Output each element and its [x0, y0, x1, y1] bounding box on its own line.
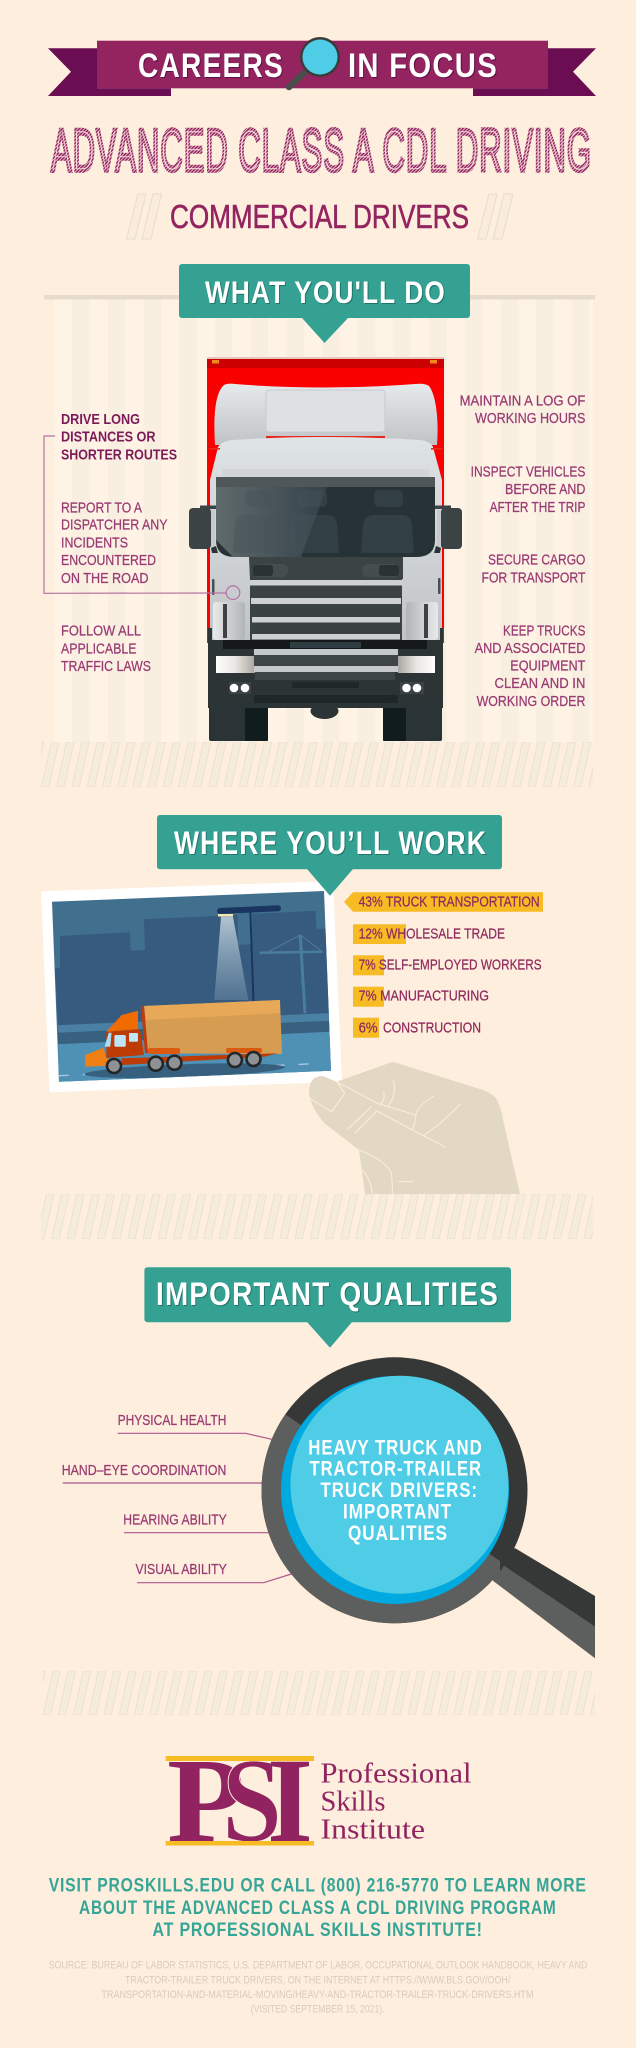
logo: professional skills institute: Professional	[320, 1758, 472, 1790]
text: duties right: FOR TRANSPORT	[482, 569, 585, 586]
text: duties right: SECURE CARGO	[488, 551, 585, 568]
text: duties right: WORKING ORDER	[477, 693, 586, 710]
icon: small magnifier	[289, 37, 340, 87]
bar: 12% wholesale trade	[353, 924, 505, 944]
banner: careers in focus: IN FOCUS	[348, 47, 498, 85]
quality labels	[62, 1412, 291, 1583]
bar: 6% construction	[353, 1018, 481, 1038]
callout line	[44, 436, 240, 600]
label: physical health: PHYSICAL HEALTH	[118, 1412, 226, 1429]
text: duties left: SHORTER ROUTES	[61, 446, 177, 463]
source note	[49, 1959, 588, 2016]
fog lamps	[229, 682, 424, 694]
icon: large magnifier	[262, 1357, 595, 1658]
text: duties left: ON THE ROAD	[61, 570, 149, 587]
text: duties left: FOLLOW ALL	[61, 623, 141, 640]
subtitle with slashes	[127, 194, 513, 239]
call to action	[49, 1875, 587, 1941]
text: duties left: REPORT TO A	[61, 499, 142, 516]
source note: (VISITED SEPTEMBER 15, 2021).	[251, 2004, 385, 2016]
bar: 7% manufacturing: 7% MANUFACTURING	[359, 988, 489, 1005]
banner: careers in focus	[48, 37, 596, 96]
heading: what you'll do: WHAT YOU'LL DO	[205, 274, 446, 310]
bar: 7% manufacturing	[353, 987, 489, 1007]
text: duties right	[460, 392, 586, 710]
call to action: AT PROFESSIONAL SKILLS INSTITUTE!	[152, 1919, 483, 1941]
text: duties left: INCIDENTS	[61, 535, 128, 552]
text: duties left: ENCOUNTERED	[61, 552, 156, 569]
chart: workplace percentages	[344, 892, 543, 1038]
truck front illustration	[189, 357, 462, 741]
source note: TRACTOR-TRAILER TRUCK DRIVERS, ON THE INTERNET AT HTTPS://WWW.BLS.GOV/OOH/	[125, 1974, 510, 1986]
text: duties left: DRIVE LONG	[61, 411, 140, 428]
heading: where you'll work: WHERE YOU’LL WORK	[174, 825, 487, 861]
text: duties right: CLEAN AND IN	[494, 675, 585, 692]
icon: hand holding photo	[309, 1062, 520, 1194]
lens text: TRUCK DRIVERS:	[320, 1479, 478, 1502]
logo: professional skills institute: P	[167, 1734, 245, 1868]
label: visual ability	[136, 1561, 291, 1583]
headlights	[216, 656, 435, 673]
label: hearing ability: HEARING ABILITY	[123, 1511, 227, 1528]
text: duties right: MAINTAIN A LOG OF	[460, 392, 585, 409]
bar: 43% truck transportation: 43% TRUCK TRANSPORTATION	[359, 894, 540, 911]
lens text: TRACTOR-TRAILER	[310, 1458, 482, 1481]
mirrors	[189, 506, 462, 553]
heading: important qualities: IMPORTANT QUALITIES	[156, 1276, 499, 1312]
bar: 7% self-employed workers: 7% SELF-EMPLOYED WORKERS	[359, 957, 542, 974]
logo: professional skills institute: I	[267, 1734, 313, 1868]
text: duties left: DISPATCHER ANY	[61, 517, 168, 534]
bar: 7% self-employed workers	[353, 955, 542, 975]
source note: TRANSPORTATION-AND-MATERIAL-MOVING/HEAVY-AND-TRACTOR-TRAILER-TRUCK-DRIVERS.HTM	[101, 1989, 534, 2001]
panel: where you'll work	[40, 815, 543, 1194]
text: duties right: AND ASSOCIATED	[475, 640, 586, 657]
bar: 12% wholesale trade: 12% WHOLESALE TRADE	[359, 925, 505, 942]
text: duties right: WORKING HOURS	[475, 410, 585, 427]
logo: professional skills institute: Skills	[320, 1786, 386, 1818]
orange truck	[85, 1000, 282, 1073]
bar: 43% truck transportation	[344, 892, 543, 912]
panel: what you'll do	[44, 264, 595, 742]
photo of truck	[40, 880, 342, 1092]
text: duties right: KEEP TRUCKS	[503, 623, 585, 640]
panel: important qualities	[62, 1267, 595, 1658]
lens text: QUALITIES	[348, 1522, 448, 1545]
heading: what you'll do	[179, 264, 470, 343]
bar: 6% construction: 6%	[359, 1019, 378, 1036]
text: duties right: BEFORE AND	[505, 481, 586, 498]
text: duties right: AFTER THE TRIP	[490, 499, 585, 516]
heading: where you'll work	[157, 815, 502, 896]
lens text	[308, 1436, 483, 1545]
label: hand-eye coordination: HAND–EYE COORDINATION	[62, 1462, 226, 1479]
text: duties left: APPLICABLE	[61, 640, 136, 657]
text: duties left: DISTANCES OR	[61, 428, 156, 445]
cab vents	[253, 564, 399, 577]
lens text: IMPORTANT	[343, 1500, 452, 1523]
text: duties left	[61, 411, 177, 675]
logo: professional skills institute	[166, 1734, 471, 1868]
label: visual ability: VISUAL ABILITY	[136, 1561, 227, 1578]
text: duties left: TRAFFIC LAWS	[61, 658, 151, 675]
heading: important qualities	[144, 1267, 511, 1348]
logo: professional skills institute: Institute	[320, 1814, 425, 1846]
wheels	[209, 703, 442, 741]
label: physical health	[118, 1412, 272, 1439]
banner: careers in focus: CAREERS	[138, 47, 284, 85]
text: duties right: INSPECT VEHICLES	[471, 464, 585, 481]
text: duties right: EQUIPMENT	[510, 658, 585, 675]
lens text: HEAVY TRUCK AND	[308, 1436, 483, 1459]
logo: professional skills institute: S	[222, 1734, 282, 1868]
subtitle with slashes: COMMERCIAL DRIVERS	[170, 198, 469, 235]
bar: 6% construction: CONSTRUCTION	[383, 1019, 481, 1036]
